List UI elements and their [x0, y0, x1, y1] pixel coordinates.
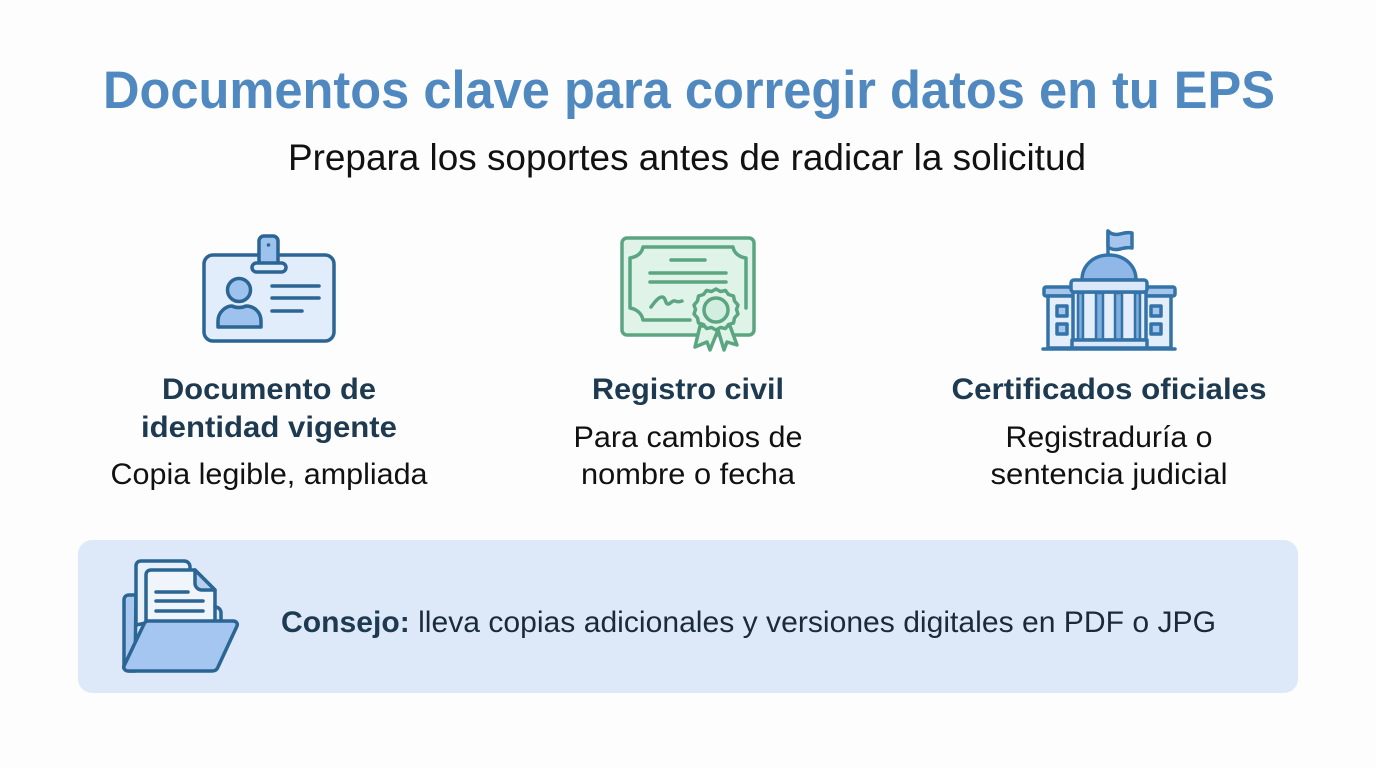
text: copia legible: Copia legible, ampliada	[110, 458, 428, 491]
text: para cambios de: Para cambios de	[574, 421, 802, 454]
title: Documentos clave para corregir datos en tu EPS	[103, 61, 1275, 120]
text: registraduría o: Registraduría o	[1006, 421, 1212, 454]
heading: identidad vigente: identidad vigente	[141, 411, 397, 444]
text: sentencia judicial: sentencia judicial	[990, 458, 1228, 491]
text: consejo: Consejo: lleva copias adicionales y versiones digitales en PDF o JPG	[281, 606, 1216, 639]
heading: registro civil: Registro civil	[592, 373, 784, 406]
heading: certificados oficiales: Certificados oficiales	[952, 373, 1266, 406]
icon: certificate	[622, 238, 754, 350]
text: nombre o fecha: nombre o fecha	[581, 458, 795, 491]
icon: ID card	[204, 236, 334, 341]
panel: consejo	[78, 540, 1298, 693]
icon: folder with documents	[124, 561, 237, 671]
subtitle: Prepara los soportes antes de radicar la solicitud	[288, 137, 1086, 178]
icon: government building	[1043, 231, 1175, 349]
heading: documento de identidad: Documento de	[162, 373, 376, 406]
